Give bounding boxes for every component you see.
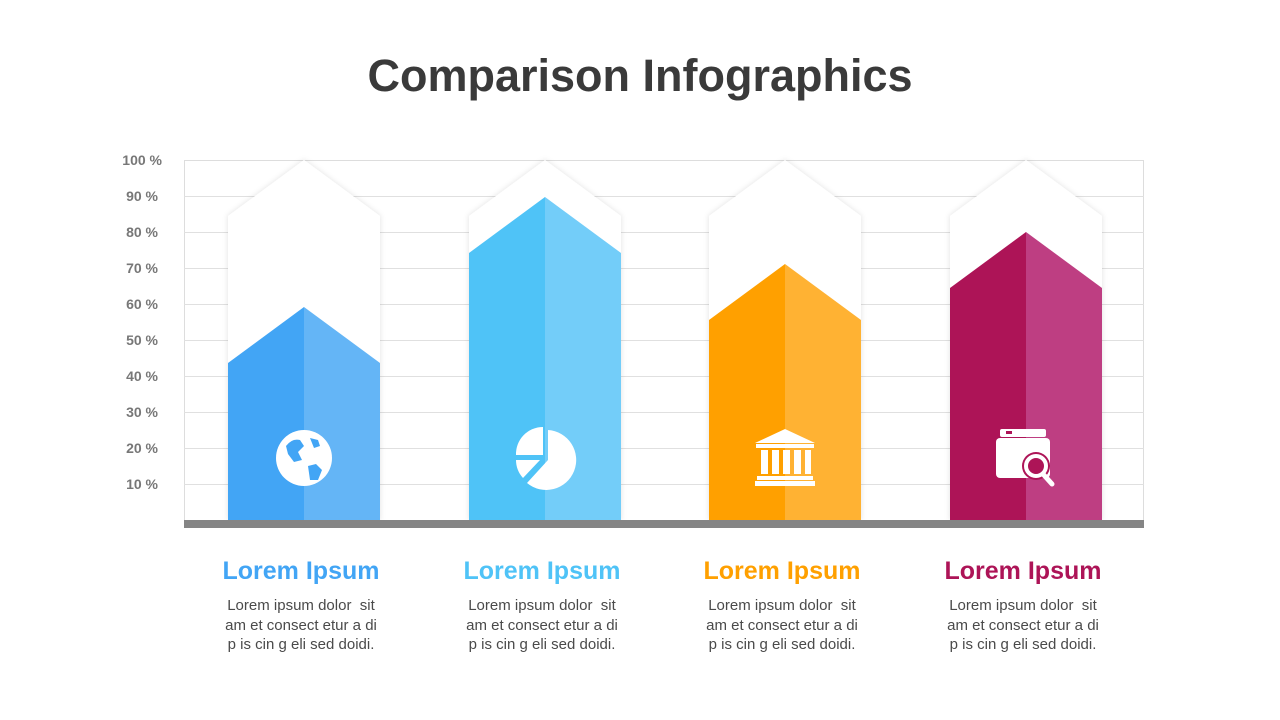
axis labels: 100 % bbox=[122, 152, 163, 168]
axis labels: 30 % bbox=[126, 404, 159, 420]
caption 4: Lorem ipsum dolor sit bbox=[949, 597, 1097, 614]
caption 1: p is cin g eli sed doidi. bbox=[228, 636, 374, 653]
caption 4: am et consect etur a di bbox=[947, 616, 1099, 634]
caption 3: am et consect etur a di bbox=[706, 616, 858, 634]
bar 2 bbox=[469, 160, 621, 520]
icon: pie chart bbox=[516, 427, 576, 490]
caption 1 bbox=[222, 557, 379, 653]
caption 2: am et consect etur a di bbox=[466, 616, 618, 634]
icon: globe bbox=[276, 430, 332, 486]
axis labels: 40 % bbox=[126, 368, 159, 384]
bar 4 bbox=[950, 160, 1102, 520]
caption 3 bbox=[704, 557, 860, 653]
caption 3: p is cin g eli sed doidi. bbox=[709, 636, 855, 653]
caption 3: Lorem Ipsum bbox=[704, 557, 860, 585]
axis labels: 70 % bbox=[126, 260, 159, 276]
axis labels bbox=[122, 152, 163, 492]
caption 2: Lorem ipsum dolor sit bbox=[468, 597, 616, 614]
axis labels: 20 % bbox=[126, 440, 159, 456]
caption 4: p is cin g eli sed doidi. bbox=[950, 636, 1096, 653]
caption 3: Lorem ipsum dolor sit bbox=[708, 597, 856, 614]
axis labels: 50 % bbox=[126, 332, 159, 348]
caption 4 bbox=[944, 557, 1101, 653]
caption 2 bbox=[464, 557, 620, 653]
axis labels: 10 % bbox=[126, 476, 159, 492]
bar 1 bbox=[228, 160, 380, 520]
icon: bank bbox=[755, 429, 815, 486]
axis labels: 60 % bbox=[126, 296, 159, 312]
title: Comparison Infographics bbox=[367, 50, 913, 101]
axis labels: 90 % bbox=[126, 188, 159, 204]
caption 2: Lorem Ipsum bbox=[464, 557, 620, 585]
caption 1: am et consect etur a di bbox=[225, 616, 377, 634]
caption 1: Lorem ipsum dolor sit bbox=[227, 597, 375, 614]
baseline bbox=[184, 520, 1144, 528]
axis labels: 80 % bbox=[126, 224, 159, 240]
icon: box search bbox=[996, 429, 1052, 484]
caption 2: p is cin g eli sed doidi. bbox=[469, 636, 615, 653]
bar 3 bbox=[709, 160, 861, 520]
caption 1: Lorem Ipsum bbox=[222, 557, 379, 585]
caption 4: Lorem Ipsum bbox=[944, 557, 1101, 585]
